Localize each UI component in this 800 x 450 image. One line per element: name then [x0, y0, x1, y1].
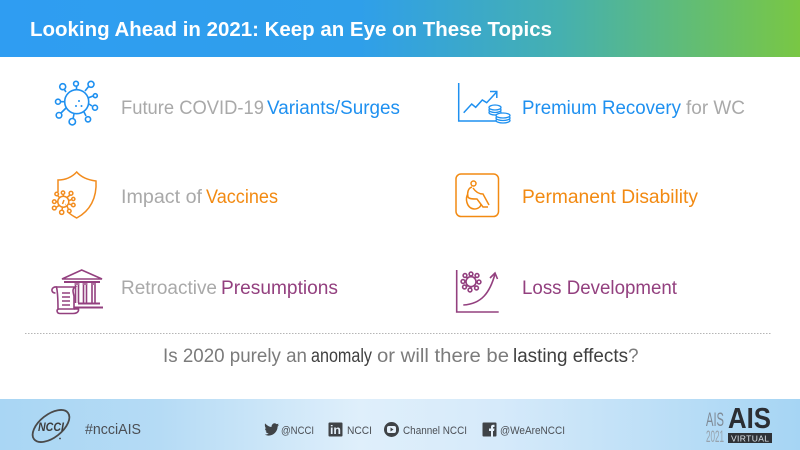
label: loss development: Loss Development: [522, 278, 678, 299]
header band: [0, 0, 800, 57]
social: facebook: [482, 422, 565, 437]
label: impact of vaccines: [121, 187, 278, 208]
social: facebook: @WeAreNCCI: [500, 425, 565, 437]
label: retroactive presumptions: [121, 278, 338, 299]
label: retroactive presumptions: Retroactive: [121, 278, 217, 299]
question text: lasting effects: [513, 346, 628, 367]
icon: shield with virus: [52, 172, 96, 218]
label: future covid variants: Variants/Surges: [267, 98, 400, 119]
social: youtube: [384, 422, 467, 437]
social: twitter: [265, 423, 314, 437]
question text: ?: [628, 346, 639, 367]
logo: AIS 2021 virtual: [706, 403, 772, 446]
label: retroactive presumptions: Presumptions: [221, 278, 338, 299]
social: linkedin: NCCI: [347, 425, 372, 437]
footer band: [0, 399, 800, 450]
title: Looking Ahead in 2021: Keep an Eye on These Topics: [30, 18, 552, 41]
icon: virus: [56, 81, 98, 125]
social: youtube: Channel NCCI: [403, 425, 467, 437]
social: linkedin: in: [330, 425, 341, 437]
icon: wheelchair: [456, 174, 498, 216]
logo: AIS 2021 virtual: AIS: [706, 410, 724, 431]
dotted divider: [25, 332, 772, 334]
label: permanent disability: Permanent Disability: [522, 187, 698, 208]
icon: courthouse and scroll: [52, 270, 103, 314]
question text: or will there be: [377, 346, 509, 367]
logo: AIS 2021 virtual: 2021: [706, 427, 724, 446]
label: future covid variants: Future COVID-19: [121, 98, 264, 119]
hashtag: #ncciAIS: [85, 421, 141, 438]
social: linkedin: [328, 422, 372, 437]
label: impact of vaccines: Impact of: [121, 187, 203, 208]
label: impact of vaccines: Vaccines: [206, 187, 278, 208]
label: premium recovery for wc: for WC: [686, 98, 745, 119]
question text: Is 2020 purely an: [163, 346, 307, 367]
question text: [163, 346, 639, 367]
question text: anomaly: [311, 346, 372, 367]
label: premium recovery for wc: Premium Recovery: [522, 98, 681, 119]
logo: NCCI: NCCI: [38, 422, 65, 434]
social: twitter: @NCCI: [281, 425, 314, 437]
label: future covid variants: [121, 98, 400, 119]
logo: NCCI: [27, 404, 75, 448]
logo: AIS 2021 virtual: VIRTUAL: [731, 434, 769, 444]
icon: virus on rising curve: [457, 270, 499, 312]
logo: AIS 2021 virtual: AIS: [728, 403, 771, 435]
icon: rising chart with coins: [459, 83, 510, 123]
